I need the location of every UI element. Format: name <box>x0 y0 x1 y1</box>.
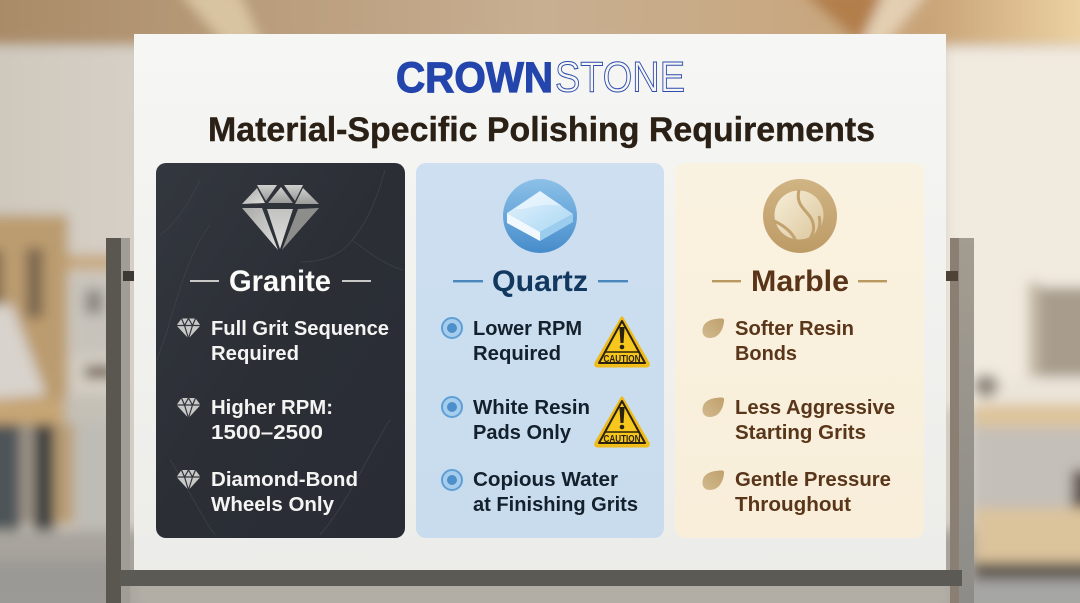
item: Full Grit Sequence Required: Full Grit Sequence <box>211 317 389 340</box>
icon: caution sign <box>596 318 648 366</box>
whiteboard stand: left post <box>106 238 134 603</box>
item: Lower RPM Required: Lower RPM <box>473 317 582 340</box>
logo: CROWNSTONE: CROWN <box>396 54 553 102</box>
item: Gentle Pressure Throughout: Gentle Pressure <box>735 468 891 491</box>
icon: quartz slab <box>503 179 577 253</box>
item: Diamond-Bond Wheels Only: Wheels Only <box>211 493 335 516</box>
icon: caution sign <box>596 398 648 446</box>
item: Higher RPM: 1500–2500 <box>211 421 323 444</box>
item: White Resin Pads Only: Pads Only <box>473 421 572 444</box>
item: Lower RPM Required <box>442 317 648 366</box>
item: Higher RPM: Higher RPM: <box>211 396 333 419</box>
heading: Granite: Granite <box>229 265 331 298</box>
icon: granite diamond <box>242 185 319 250</box>
item: Softer Resin Bonds: Softer Resin <box>735 317 854 340</box>
item: Full Grit Sequence Required: Required <box>211 342 299 365</box>
item: Less Aggressive Starting Grits <box>702 396 895 444</box>
item: Copious Water at Finishing Grits: Copious Water <box>473 468 618 491</box>
item: Higher RPM <box>176 396 333 444</box>
item: Full Grit Sequence Required <box>176 317 389 365</box>
panel: quartz <box>416 163 664 538</box>
whiteboard stand: right post <box>946 238 974 603</box>
item: Less Aggressive Starting Grits: Less Aggressive <box>735 396 895 419</box>
item: White Resin Pads Only <box>442 396 648 446</box>
panel: granite <box>156 163 405 538</box>
heading: Marble: Marble <box>751 265 849 298</box>
item: Copious Water at Finishing Grits: at Finishing Grits <box>473 493 638 516</box>
item: Diamond-Bond Wheels Only: Diamond-Bond <box>211 468 358 491</box>
item: Softer Resin Bonds: Bonds <box>735 342 797 365</box>
item: Gentle Pressure Throughout: Throughout <box>735 493 851 516</box>
item: Softer Resin Bonds <box>702 317 854 365</box>
item: Gentle Pressure Throughout <box>702 468 891 516</box>
item: White Resin Pads Only: White Resin <box>473 396 590 419</box>
icon: marble sphere <box>763 179 837 253</box>
item: Copious Water at Finishing Grits <box>442 468 638 516</box>
board <box>134 34 946 570</box>
panel: marble <box>675 163 924 538</box>
title: Material-Specific Polishing Requirements <box>208 111 875 149</box>
logo: CROWNSTONE <box>396 54 685 102</box>
logo: CROWNSTONE: STONE <box>555 54 685 102</box>
stone veins <box>157 170 403 535</box>
item: Diamond-Bond Wheels Only <box>176 468 358 516</box>
item: Less Aggressive Starting Grits: Starting Grits <box>735 421 866 444</box>
item: Lower RPM Required: Required <box>473 342 561 365</box>
stand crossbar <box>120 570 962 586</box>
heading: Quartz: Quartz <box>492 265 588 298</box>
